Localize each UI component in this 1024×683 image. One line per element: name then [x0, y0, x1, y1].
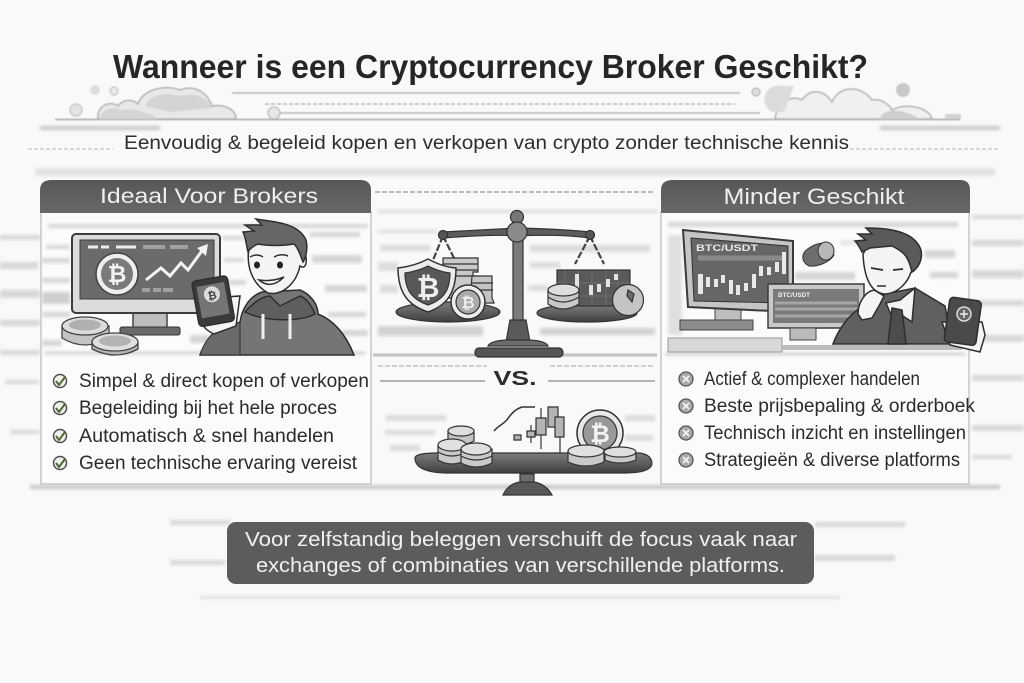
icon: coin stack	[62, 317, 138, 355]
list item 2: Beste prijsbepaling & orderboek	[704, 396, 975, 417]
icon: lower platform with coins and candlesticks: ₿	[590, 421, 610, 448]
panel: Minder Geschikt	[661, 180, 985, 484]
icon: trading monitors with BTC/USDT: BTC/USDT	[778, 293, 810, 299]
icon: left pan with shield and coins: ₿	[461, 294, 475, 312]
icon: thoughtful man in suit with phone	[833, 228, 985, 352]
list item 1: Simpel & direct kopen of verkopen	[79, 371, 369, 392]
vs label: VS.	[494, 368, 536, 390]
icon: balance scale	[433, 210, 604, 357]
illustration background streaks	[665, 222, 965, 355]
hand on chin	[858, 290, 884, 320]
icon: lower platform with coins and candlesticks	[415, 407, 652, 495]
bullet list: ideal	[54, 371, 369, 474]
list item 1: Actief & complexer handelen	[704, 369, 920, 390]
subtitle: Eenvoudig & begeleid kopen en verkopen van crypto zonder technische kennis	[124, 133, 849, 154]
icon: left pan with shield and coins: ₿	[417, 272, 439, 303]
list item 3: Technisch inzicht en instellingen	[704, 423, 966, 444]
list item 4: Strategieën & diverse platforms	[704, 450, 960, 471]
illustration background streaks	[42, 224, 368, 354]
icon: trading monitors with BTC/USDT: BTC/USDT	[696, 243, 759, 253]
icon: desktop monitor with bitcoin chart: ₿	[108, 261, 126, 287]
face	[248, 238, 306, 293]
callout: conclusion: Voor zelfstandig beleggen verschuift de focus vaak naar	[245, 529, 797, 551]
icon: desktop monitor with bitcoin chart	[72, 234, 220, 335]
panel header: Minder Geschikt: Minder Geschikt	[724, 184, 904, 209]
callout: conclusion	[227, 522, 814, 584]
panel header: Minder Geschikt	[661, 180, 970, 213]
callout: conclusion: exchanges of combinaties van verschillende platforms.	[256, 555, 785, 577]
hair	[243, 219, 307, 262]
panel: centre comparison	[373, 192, 658, 495]
phone and hand	[942, 322, 985, 352]
icon: trading monitors with BTC/USDT	[668, 230, 962, 352]
face	[863, 242, 916, 294]
arm and hand	[200, 322, 240, 355]
panel header: Ideaal Voor Brokers: Ideaal Voor Brokers	[100, 185, 318, 208]
list item 4: Geen technische ervaring vereist	[79, 453, 358, 474]
hair	[855, 228, 921, 272]
decorative background streaks	[0, 126, 1024, 599]
bullet list: less suitable	[679, 369, 975, 471]
title: Wanneer is een Cryptocurrency Broker Geschikt?	[113, 48, 868, 85]
panel: Ideaal Voor Brokers	[40, 180, 371, 484]
panel header: Ideaal Voor Brokers	[40, 180, 371, 213]
icon: smiling young man in hoodie holding phone	[191, 219, 354, 355]
suit	[833, 288, 952, 344]
list item 3: Automatisch & snel handelen	[79, 426, 334, 447]
list item 2: Begeleiding bij het hele proces	[79, 398, 337, 419]
illustration: clouds and lines under title	[55, 83, 961, 120]
icon: right pan with chart and coins	[537, 270, 644, 322]
icon: left pan with shield and coins	[396, 258, 500, 322]
hoodie body	[200, 290, 354, 355]
icon: smiling young man in hoodie holding phone: ₿	[207, 290, 218, 303]
